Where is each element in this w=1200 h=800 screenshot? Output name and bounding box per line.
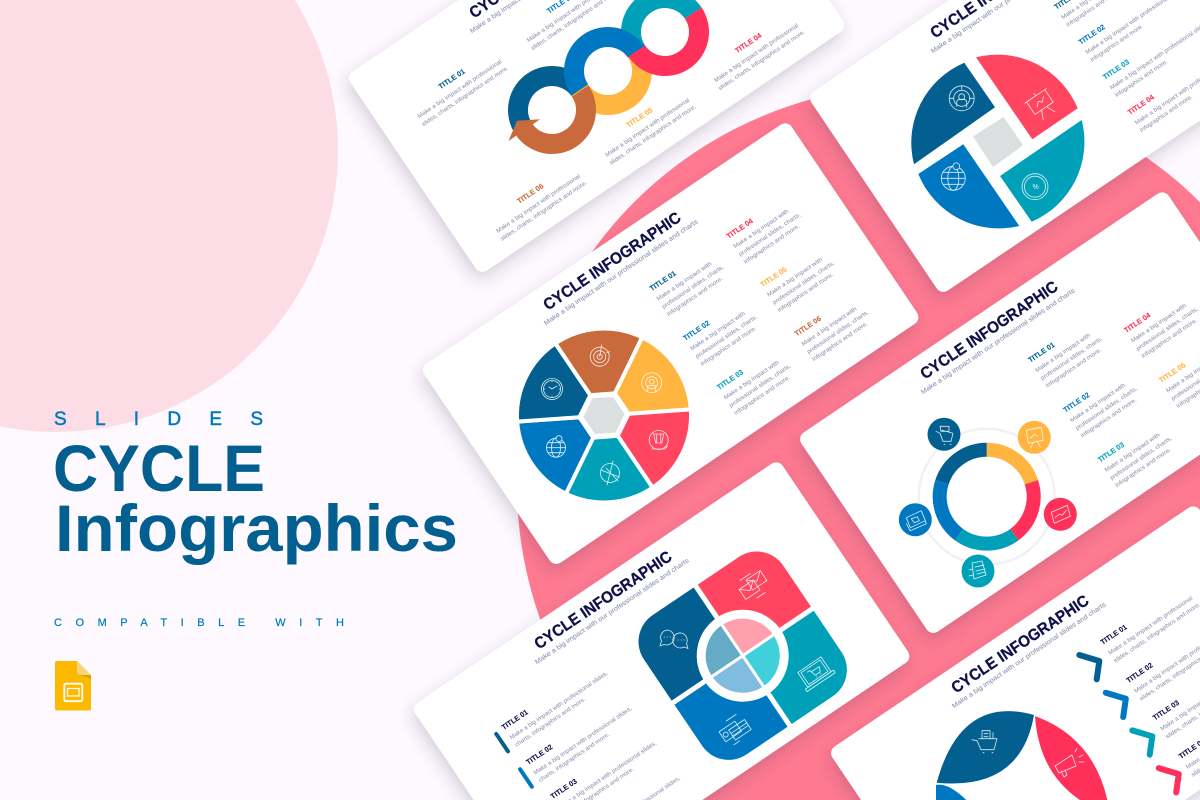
slide text: rings: TITLE 04 — [733, 30, 764, 55]
slide text: pie: TITLE 04 — [725, 216, 755, 241]
icon: target person — [949, 86, 974, 111]
icon: percent badge — [1022, 174, 1048, 200]
icon: laptop cart — [795, 655, 835, 692]
slide text: pie: infographics and more. — [743, 223, 802, 265]
slide text: donut — [909, 219, 1200, 550]
slide text: petals: TITLE 02 — [1125, 661, 1154, 685]
slide text: rings: slides, charts, infographics and more. — [421, 65, 510, 128]
slide text: donut: Make a big impact with — [1130, 303, 1188, 344]
slide text: donut: professional slides, charts, — [1040, 336, 1104, 382]
node: laptop — [899, 503, 932, 536]
slide text: pie: TITLE 06 — [793, 314, 823, 338]
slide text: donut: TITLE 02 — [1061, 390, 1091, 414]
slide text: donut: Make a big impact with — [1070, 383, 1127, 424]
slide text: donut: TITLE 01 — [1026, 340, 1056, 364]
slide text: pie: infographics and more. — [666, 276, 725, 318]
icon: compass — [600, 461, 620, 485]
slide text: pie: professional slides, charts, — [806, 309, 870, 355]
heading: CYCLE Infographics: Infographics — [55, 491, 458, 565]
slide text: pinwheel: TITLE 02 — [1077, 22, 1107, 47]
icon: shopping cart — [972, 731, 997, 753]
slide text: petals — [940, 541, 1200, 800]
slide text: pie: professional slides, charts, — [728, 363, 793, 409]
slide text: petals: TITLE 03 — [1151, 698, 1181, 722]
chart: petals — [936, 711, 1110, 800]
slide text: rings: Make a big impact with professional — [605, 98, 691, 159]
slide panel: donut with nodes — [797, 189, 1200, 636]
slide text: pie: TITLE 03 — [715, 368, 745, 392]
slide text: donut: CYCLE INFOGRAPHIC — [918, 278, 1062, 383]
slide text: pie: Make a big impact with — [723, 360, 780, 401]
slide text: donut: TITLE 03 — [1096, 440, 1126, 464]
slide text: square cycle: charts, infographics and more. — [538, 732, 611, 784]
slide text: pinwheel: infographics and more. — [1090, 24, 1145, 63]
slide text: donut: Make a big impact with — [1104, 432, 1161, 474]
slide text: square cycle: TITLE 01 — [500, 707, 530, 732]
icon: percent badge: % — [1032, 184, 1039, 191]
node: cart — [928, 418, 960, 451]
slide text: pie — [532, 152, 876, 477]
label: compatible with: COMPATIBLE WITH — [54, 617, 344, 629]
slide text: square cycle: Make a big impact with professional slides, — [533, 706, 634, 776]
node: chart screen — [1044, 498, 1077, 531]
chart: pinwheel segments — [911, 55, 1084, 228]
chart: interlocking rings with arrow — [508, 0, 699, 144]
slide text: rings: TITLE 01 — [437, 67, 467, 91]
chart: donut ring — [919, 429, 1055, 565]
slide text: pinwheel: TITLE 04 — [1126, 92, 1157, 117]
slide text: petals: slides, charts, infographics and more. — [1113, 602, 1200, 664]
slide text: pie: TITLE 01 — [648, 269, 678, 293]
slide text: donut: professional slides, charts, — [1109, 436, 1174, 482]
slide text: donut: Make a big impact with — [1035, 333, 1092, 374]
icon: presentation easel — [1023, 86, 1060, 123]
slide text: rings: slides, charts, infographics and more. — [609, 104, 698, 167]
slide text: petals: Make a big impact with professional — [1108, 596, 1194, 657]
heading: CYCLE Infographics: CYCLE — [53, 431, 265, 505]
slide text: square cycle: Make a big impact with professional slides, — [509, 670, 610, 741]
slide text: donut: professional slides, charts, — [1075, 386, 1139, 432]
slide text: pinwheel: infographics and more. — [1114, 59, 1169, 99]
slide text: rings: Make a big impact with professional — [417, 59, 503, 120]
slide text: pie: Make a big impact with — [689, 311, 747, 352]
heading: CYCLE Infographics — [53, 431, 458, 565]
icon: target — [590, 345, 610, 366]
slide text: donut: Make a big impact with our professional slides and charts — [920, 287, 1077, 396]
slide text: square cycle: charts, infographics and more. — [514, 696, 587, 749]
slide text: pie: infographics and more. — [811, 321, 870, 363]
slide text: pie: Make a big impact with — [767, 257, 824, 298]
icon: globe — [546, 436, 566, 457]
slide text: donut: infographics and more. — [1080, 397, 1138, 439]
decorative pink circle top left — [0, 0, 338, 432]
slide text: rings: slides, charts, infographics and more. — [500, 180, 589, 243]
node: easel — [1018, 421, 1051, 454]
icon: target person — [642, 373, 662, 393]
chevrons — [1079, 655, 1179, 792]
chart: six-segment pie — [517, 329, 691, 502]
slide text: petals: Make a big impact with our professional slides and charts — [951, 601, 1108, 710]
slide panel: rounded square cycle — [411, 459, 912, 800]
slide text: square cycle: TITLE 02 — [524, 742, 554, 767]
chart: rounded square quadrants with centre pie — [626, 539, 859, 772]
slide text: square cycle: Make a big impact with our professional slides and charts — [534, 557, 691, 666]
slide text: pinwheel: TITLE 03 — [1101, 57, 1131, 82]
slide text: square cycle — [463, 541, 789, 800]
icon: clock — [542, 378, 562, 400]
slide text: pie: Make a big impact with — [801, 306, 858, 348]
slide text: petals: CYCLE INFOGRAPHIC — [949, 592, 1093, 697]
slide text: pie: professional slides, charts, — [661, 264, 725, 310]
slide text: pie: professional slides, charts, — [738, 212, 802, 258]
slide text: petals: TITLE 01 — [1099, 622, 1129, 647]
icon: google slides — [55, 661, 91, 710]
slide text: donut: infographics and more. — [1045, 347, 1103, 389]
icon: chat bubbles — [660, 630, 688, 648]
slide text: donut: infographics and more. — [1141, 318, 1199, 360]
slide text: donut: TITLE 04 — [1122, 310, 1153, 335]
icon: credit cards — [716, 712, 753, 748]
slide text: pie: infographics and more. — [777, 272, 835, 314]
slide panel: petals and chevrons — [828, 503, 1200, 800]
slide text: square cycle: CYCLE INFOGRAPHIC — [532, 548, 676, 653]
slide panel: six-part pie — [420, 120, 921, 567]
icon: globe with pin — [941, 163, 965, 190]
eyebrow: SLIDES: SLIDES — [54, 409, 263, 430]
icon: envelopes — [735, 568, 772, 604]
slide text: rings: TITLE 06 — [515, 181, 545, 206]
slide text: pie: CYCLE INFOGRAPHIC — [541, 209, 685, 314]
big coral circle behind slides — [517, 85, 1200, 800]
slide text: rings: slides, charts, infographics and more. — [718, 29, 807, 92]
slide text: pinwheel — [919, 0, 1200, 206]
slide text: pie: Make a big impact with — [733, 209, 790, 250]
slide text: pie: infographics and more. — [700, 325, 758, 368]
slide text: donut: professional slides, charts, — [1136, 306, 1200, 352]
icon: trophy badge — [649, 430, 668, 450]
slide text: pie: TITLE 05 — [759, 265, 788, 289]
slide text: rings: TITLE 05 — [624, 105, 654, 130]
slide panel: four-part pinwheel — [807, 0, 1200, 295]
slide text: rings — [382, 0, 808, 243]
slide text: pie: professional slides, charts, — [695, 314, 759, 360]
slide text: rings: Make a big impact with professional — [495, 174, 582, 235]
slide text: pie: professional slides, charts, — [772, 260, 836, 306]
slide text: pie: infographics and more. — [734, 375, 792, 417]
slide text: rings: Make a big impact with professional — [714, 23, 800, 84]
slide text: donut: TITLE 05 — [1157, 361, 1187, 385]
slide text: pie: Make a big impact with our professional slides and charts — [543, 218, 700, 327]
slide text: donut: infographics and more. — [1114, 447, 1173, 489]
slide text: pie: TITLE 02 — [681, 318, 711, 343]
slide text: pie: Make a big impact with — [656, 261, 713, 302]
slide panel: six interlocking rings — [346, 0, 847, 275]
icon: megaphone — [1055, 748, 1084, 777]
slide text: pinwheel: infographics and more. — [1139, 94, 1194, 134]
node: document — [962, 554, 994, 588]
